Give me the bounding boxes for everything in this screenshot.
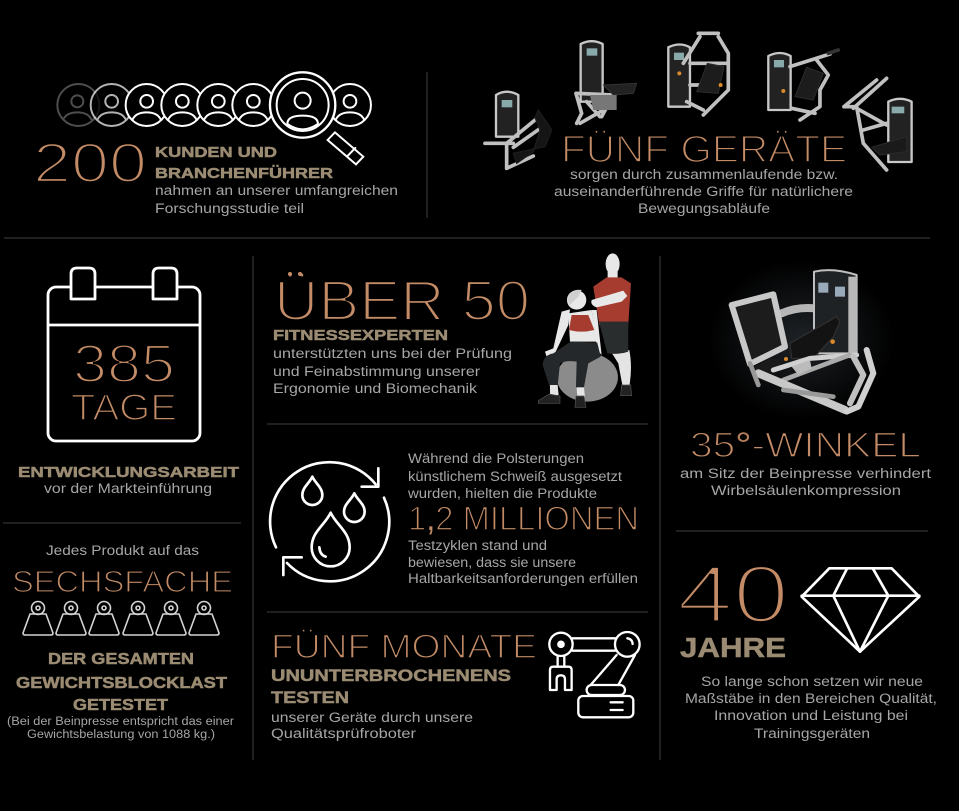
icon: diamond bbox=[802, 568, 919, 652]
text: test cycles bbox=[408, 538, 638, 586]
text: experts description: und Feinabstimmung unserer bbox=[273, 364, 481, 379]
panel: 40 years bbox=[677, 549, 937, 741]
subheading: ununterbrochenes Testen: UNUNTERBROCHENENS bbox=[271, 666, 511, 685]
text: intro: Jedes Produkt auf das bbox=[46, 543, 199, 558]
text: standards: Maßstäbe in den Bereichen Qualität, bbox=[685, 691, 937, 706]
text: research study bbox=[155, 183, 398, 216]
text: standards: So lange schon setzen wir neue bbox=[701, 674, 923, 689]
text: grips description: auseinanderführende Griffe für natürlichere bbox=[554, 184, 853, 199]
image: five gym machines bbox=[485, 33, 912, 170]
panel: 1.2 million cycles bbox=[270, 451, 639, 586]
panel: fitness experts bbox=[273, 253, 632, 407]
text: grips description: sorgen durch zusammenlaufende bzw. bbox=[570, 167, 838, 182]
text: test cycles: bewiesen, dass sie unsere bbox=[408, 555, 576, 570]
text: grips description: Bewegungsabläufe bbox=[638, 201, 770, 216]
text: grips description bbox=[554, 167, 853, 216]
text: sweat test intro: künstlichem Schweiß ausgesetzt bbox=[408, 469, 622, 484]
text: sweat test intro: Während die Polsterungen bbox=[408, 451, 584, 466]
panel: 385 days bbox=[18, 268, 239, 496]
icon: calendar bbox=[48, 268, 200, 441]
icon: robot arm bbox=[549, 632, 640, 717]
text: spine compression: Wirbelsäulenkompression bbox=[711, 483, 901, 498]
heading: Sechsfache: SECHSFACHE bbox=[12, 564, 233, 599]
heading: Über 50: ÜBER 50 bbox=[274, 269, 530, 333]
text: test cycles: Testzyklen stand und bbox=[408, 538, 547, 553]
text: test cycles: Haltbarkeitsanforderungen erfüllen bbox=[408, 571, 638, 586]
heading: Kunden und Branchenführer bbox=[155, 145, 334, 182]
icon: row of people with magnifying glass bbox=[57, 72, 371, 164]
text: experts description: Ergonomie und Biomechanik bbox=[273, 381, 477, 396]
image: two athletes with exercise ball bbox=[538, 253, 632, 407]
heading: Jahre: JAHRE bbox=[680, 632, 786, 663]
text: spine compression bbox=[680, 466, 931, 498]
text: sweat test intro bbox=[407, 451, 622, 501]
heading: Kunden und Branchenführer: BRANCHENFÜHRER bbox=[155, 165, 334, 182]
panel: five machines bbox=[485, 33, 912, 216]
text: quality robots: unserer Geräte durch unsere bbox=[271, 710, 473, 725]
subheading: Fitnessexperten: FITNESSEXPERTEN bbox=[273, 327, 448, 344]
heading: Fünf Monate: FÜNF MONATE bbox=[271, 628, 537, 666]
text: research study: Forschungsstudie teil bbox=[155, 201, 304, 216]
text: experts description bbox=[273, 346, 512, 396]
text: experts description: unterstützten uns bei der Prüfung bbox=[273, 346, 512, 361]
heading: der gesamten Gewichtsblocklast getestet: DER GESAMTEN bbox=[48, 651, 194, 668]
heading: Kunden und Branchenführer: KUNDEN UND bbox=[155, 145, 277, 161]
icon: six weights bbox=[23, 602, 219, 635]
text: sweat test intro: wurden, hielten die Produkte bbox=[407, 486, 597, 501]
text: standards bbox=[685, 674, 937, 741]
heading: der gesamten Gewichtsblocklast getestet: GETESTET bbox=[73, 697, 169, 714]
text: leg press note: (Bei der Beinpresse entspricht das einer bbox=[7, 716, 234, 728]
text: before launch: vor der Markteinführung bbox=[44, 481, 212, 496]
heading: der gesamten Gewichtsblocklast getestet bbox=[16, 651, 228, 714]
panel: five months bbox=[271, 628, 640, 741]
number: 385: 385 bbox=[73, 334, 175, 394]
number: 40: 40 bbox=[677, 549, 789, 640]
label: Tage: TAGE bbox=[71, 387, 177, 428]
heading: 35 degree angle: 35°-WINKEL bbox=[690, 426, 921, 465]
icon: water drops with cycle arrows bbox=[270, 462, 389, 581]
heading: Fünf Geräte: FÜNF GERÄTE bbox=[561, 129, 847, 171]
heading: 1,2 Millionen: 1,2 MILLIONEN bbox=[408, 500, 639, 538]
text: leg press note: Gewichtsbelastung von 1088 kg.) bbox=[27, 729, 215, 741]
image: leg press machine bbox=[708, 260, 895, 420]
subheading: ununterbrochenes Testen: TESTEN bbox=[271, 688, 349, 707]
heading: der gesamten Gewichtsblocklast getestet: GEWICHTSBLOCKLAST bbox=[16, 675, 228, 692]
text: standards: Innovation und Leistung bei bbox=[714, 708, 908, 723]
text: quality robots bbox=[271, 710, 473, 741]
number: 200: 200 bbox=[33, 131, 147, 194]
text: spine compression: am Sitz der Beinpresse verhindert bbox=[680, 466, 931, 481]
heading: Entwicklungsarbeit: ENTWICKLUNGSARBEIT bbox=[18, 464, 239, 481]
text: leg press note bbox=[7, 716, 234, 741]
panel: 35 degree angle bbox=[680, 260, 931, 498]
text: research study: nahmen an unserer umfangreichen bbox=[155, 183, 398, 198]
panel: 200 customers bbox=[33, 72, 398, 216]
panel: six times load bbox=[7, 543, 234, 741]
text: standards: Trainingsgeräten bbox=[754, 726, 870, 741]
subheading: ununterbrochenes Testen bbox=[271, 666, 511, 707]
text: quality robots: Qualitätsprüfroboter bbox=[271, 726, 417, 741]
